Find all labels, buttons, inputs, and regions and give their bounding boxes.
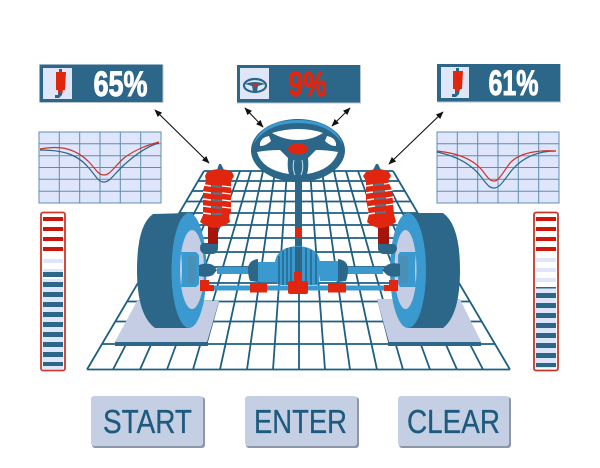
red joints on tie rod [250,228,346,294]
left wheel [137,213,206,328]
left spring strut [200,164,234,244]
steering wheel [251,119,345,182]
steering column [295,175,302,285]
value: 9%: 9% [288,65,326,104]
value: 61%: 61% [488,64,538,103]
button: ENTER [245,396,359,448]
value: 65%: 65% [94,65,148,104]
right spring strut [363,164,396,244]
button: START [91,396,205,448]
button: ENTER: ENTER [254,404,347,441]
button: CLEAR [398,396,511,448]
arrow: steering to right of panel [332,108,350,126]
panel: steering reading [237,65,361,104]
hub boots over wheels [199,243,400,277]
right red joint [384,280,398,291]
right wheel pad [377,299,481,346]
icon: right shock absorber [452,68,463,97]
icon: left shock absorber [55,69,66,98]
right wheel [390,213,460,328]
chart: right response curve [437,132,559,203]
button: CLEAR: CLEAR [407,404,500,441]
gauge: right level bar [534,212,558,370]
left wheel pad [115,301,219,346]
perspective floor grid [87,171,510,370]
icon: small steering wheel [244,79,266,92]
chart: left response curve [39,132,161,203]
drivetrain: axle and differential [214,246,386,290]
arrow: right shock to panel [389,112,443,164]
left red joint [200,280,214,291]
arrow: left shock to panel [155,110,209,163]
button: START: START [103,404,192,441]
arrow: steering to left of panel [245,108,263,127]
gauge: left level bar [41,212,65,370]
panel: right shock reading [437,64,561,103]
panel: left shock reading [40,64,164,104]
